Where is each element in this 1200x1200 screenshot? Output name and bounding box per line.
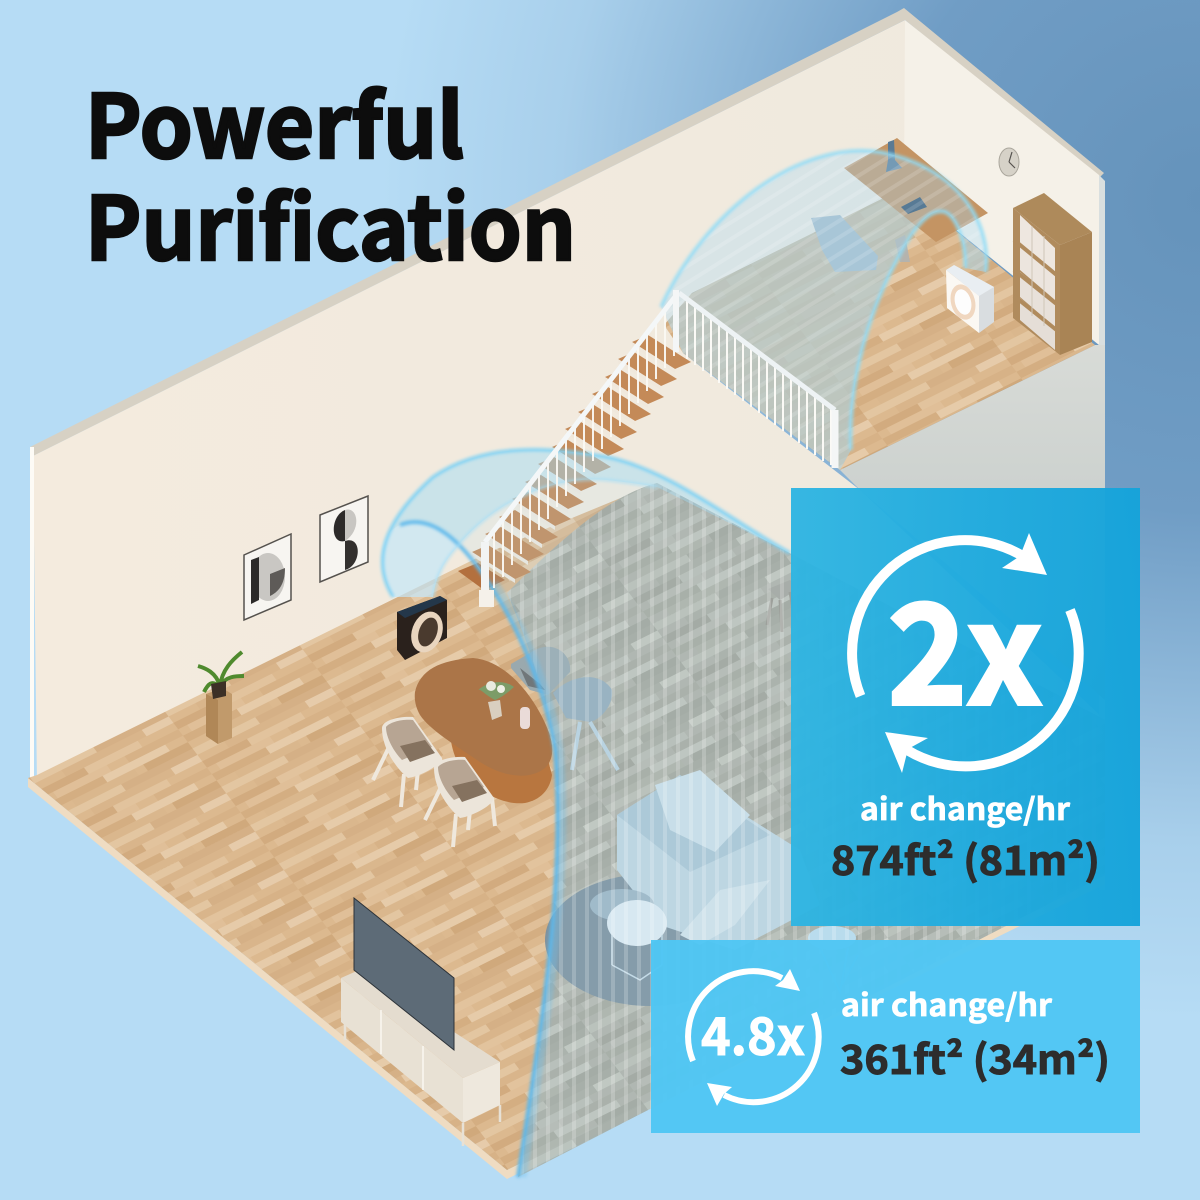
panel background (791, 488, 1140, 926)
white air purifier (946, 265, 994, 333)
floor under the upper airflow (668, 199, 986, 470)
floor under the large airflow (507, 483, 1105, 1177)
desk (844, 138, 988, 262)
chair front left (373, 717, 443, 807)
airflow leading edge glow (494, 583, 562, 1177)
plant on pedestal (198, 652, 244, 744)
upper room side wall (904, 20, 1099, 345)
bookcase (1013, 193, 1092, 355)
chair front right (425, 757, 495, 847)
dining table (415, 658, 552, 803)
area rug (545, 874, 755, 1006)
2x: 2x (888, 544, 1042, 744)
airflow outer edge (382, 450, 790, 597)
tablet (901, 197, 927, 214)
panel background (651, 940, 1140, 1133)
airflow leading edge (400, 522, 558, 1177)
small purifier on table (520, 707, 530, 729)
inner edge (433, 479, 657, 597)
television (354, 898, 454, 1050)
chair behind table (511, 647, 570, 695)
airflow upper band (382, 450, 790, 597)
dark air purifier (397, 596, 448, 660)
side table (808, 926, 858, 992)
title: Powerful (85, 57, 464, 184)
lower floor (28, 483, 1105, 1179)
air change label: air change/hr (860, 785, 1071, 829)
balcony railing (676, 290, 835, 468)
desk lamp (886, 140, 902, 172)
coverage: 874ft² (81m²) (831, 829, 1100, 887)
stair railing (479, 293, 678, 607)
bar stool (767, 580, 800, 632)
wall art right (320, 496, 368, 582)
back wall (33, 20, 1105, 785)
air change label: air change/hr (841, 981, 1053, 1025)
staircase (472, 335, 691, 583)
left wall edge (30, 447, 34, 782)
title: Purification (85, 159, 576, 286)
airflow stripes (507, 483, 1105, 1177)
upper airflow (661, 151, 987, 470)
panel: 4.8x air change (651, 940, 1140, 1133)
sofa (617, 770, 820, 950)
4.8x: 4.8x (701, 995, 805, 1070)
large airflow (381, 450, 1105, 1177)
title (85, 57, 576, 286)
back wall top cap (30, 8, 1104, 456)
back lobe (381, 522, 490, 597)
tv stand (341, 970, 500, 1146)
wall clock (999, 148, 1019, 176)
airflow body (382, 450, 1105, 1177)
stair bottom step (458, 563, 505, 590)
panel: 2x air change (791, 488, 1140, 926)
circular arrows (688, 969, 819, 1106)
circular arrows (852, 533, 1079, 773)
coverage: 361ft² (34m²) (840, 1028, 1110, 1086)
flower vase (488, 700, 502, 720)
coffee tables (590, 889, 667, 980)
chair under airflow (553, 677, 618, 770)
outer wall edge (1099, 175, 1105, 890)
upper floor front face (840, 345, 1105, 700)
upper floor (664, 188, 1095, 470)
upper office chair (811, 215, 878, 272)
wall art left (244, 534, 291, 620)
